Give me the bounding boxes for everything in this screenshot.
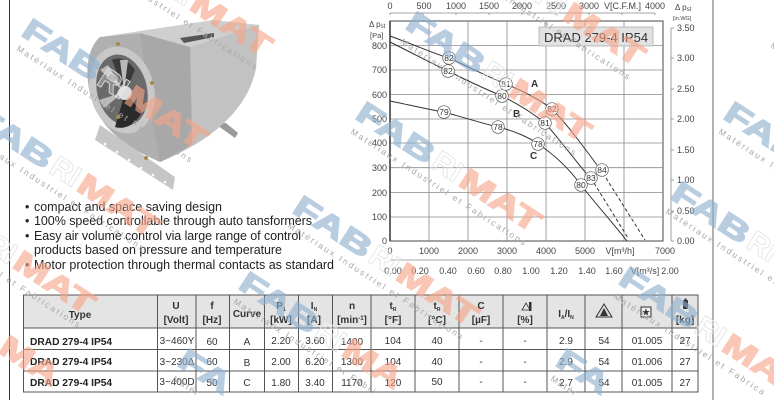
table header row: 1 [283, 307, 286, 313]
watermark: repeated FABRIMAT logo: FAB [16, 13, 107, 88]
table header row: Type [69, 310, 92, 321]
left axis: static pressure in Pa: 300 [372, 163, 387, 173]
table header row: [A] [307, 315, 321, 326]
watermark: repeated FABRIMAT logo: FA [172, 343, 238, 400]
watermark: repeated FABRIMAT logo: FAB [665, 176, 756, 251]
right axis: static pressure in inches WG: 0.00 [677, 236, 695, 246]
table row: curve A: 60 [206, 337, 218, 348]
curve A: A [531, 79, 538, 90]
table header row: A [561, 315, 565, 321]
bottom axis: V in cubic metres per second: 0.40 [439, 266, 457, 276]
table row: curve C: 1.80 [271, 378, 291, 389]
bottom axis: V in cubic metres per hour: 5000 [575, 246, 595, 256]
table row: curve B: B [244, 358, 251, 369]
icon: centrifugal fan photo [80, 20, 260, 190]
table row: curve A [30, 336, 691, 348]
table row: curve C: C [243, 378, 251, 389]
watermark: repeated FABRIMAT logo: FAB [287, 190, 378, 265]
watermark: repeated FABRIMAT logo: MA [716, 328, 774, 391]
top axis: V in CFM: 500 [416, 1, 432, 11]
bottom axis: V in cubic metres per second: 0.20 [411, 266, 429, 276]
table header row: R [437, 307, 441, 313]
table header row: -1 [358, 316, 364, 322]
left axis: static pressure in Pa: st [381, 24, 386, 30]
left axis: static pressure in Pa: 700 [372, 65, 387, 75]
feature bullet list: compact and space saving design [34, 200, 222, 214]
feature bullet list: • [25, 258, 29, 272]
curve B: B [513, 109, 520, 120]
feature bullet list: • [25, 214, 29, 228]
feature bullet list: • [25, 200, 29, 214]
icon: weight [683, 298, 688, 309]
right axis: static pressure in inches WG: 1.00 [677, 175, 695, 185]
top axis: V in CFM: 0 [387, 1, 393, 11]
left axis: static pressure in Pa: 600 [372, 90, 387, 100]
table row: curve B: 2.9 [559, 357, 573, 368]
left axis: static pressure in Pa: 100 [372, 212, 387, 222]
table header row: C [477, 301, 485, 312]
table header row: n [349, 301, 355, 312]
right axis: static pressure in inches WG: Δ p [675, 3, 687, 12]
left axis: static pressure in Pa [369, 20, 387, 246]
watermark: repeated FABRIMAT logo: MA [336, 333, 408, 396]
efficiency value markers: 82 [444, 53, 454, 63]
specifications table [24, 295, 698, 392]
bottom axis: V in cubic metres per second: 1.20 [550, 266, 568, 276]
watermark: repeated FABRIMAT logo: FA [550, 343, 616, 400]
table row: curve C: 120 [385, 378, 402, 389]
table row: curve C: DRAD 279-4 IP54 [30, 378, 112, 389]
top axis: V in CFM [387, 1, 665, 15]
bottom axis: V in cubic metres per second [384, 260, 679, 276]
bottom axis: V in cubic metres per hour [387, 246, 675, 256]
table row: curve C: 50 [431, 377, 443, 388]
watermark: repeated FABRIMAT logo: Matér [549, 373, 579, 398]
table header row: P [276, 301, 283, 312]
curve A [390, 36, 645, 240]
bottom axis: V in cubic metres per hour: 2000 [458, 246, 478, 256]
bottom axis: V in cubic metres per second: 1.40 [578, 266, 596, 276]
feature bullet list [25, 200, 334, 272]
table header row: ] [364, 315, 367, 326]
table row: curve A: 01.005 [632, 336, 663, 347]
table row: curve A: 2.9 [559, 336, 573, 347]
top axis: V in CFM: 1500 [479, 1, 499, 11]
top axis: V in CFM: 2000 [512, 1, 532, 11]
right axis: static pressure in inches WG: 3.00 [677, 53, 695, 63]
feature bullet list: Motor protection through thermal contacts as standard [34, 258, 334, 272]
efficiency value markers: 81 [540, 118, 550, 128]
table row: curve A: 3.60 [305, 336, 325, 347]
table row: curve C: 2.7 [559, 378, 573, 389]
table row: curve B: 2.00 [271, 357, 291, 368]
watermark: repeated FABRIMAT logo: FAB [400, 6, 491, 81]
table row: curve B: - [479, 357, 483, 368]
watermark: repeated FABRIMAT logo: MAT [71, 168, 165, 245]
watermark: repeated FABRIMAT logo: FAB [350, 96, 441, 171]
icon: delta I [522, 302, 532, 311]
table header row: I [558, 309, 561, 320]
bottom axis: V in cubic metres per second: 1.60 [605, 266, 623, 276]
efficiency value markers: 81 [501, 79, 511, 89]
right axis: static pressure in inches WG [671, 3, 695, 246]
table header row: N [570, 315, 574, 321]
table row: curve B: 3~230Δ [160, 357, 195, 368]
chart grid and frame [390, 21, 663, 241]
bottom axis: V in cubic metres per hour: 3000 [497, 246, 517, 256]
bottom axis: V in cubic metres per second: 0.80 [494, 266, 512, 276]
table header row: [Volt] [164, 315, 188, 326]
table header row: [%] [517, 315, 533, 326]
curve C [390, 101, 627, 241]
top axis: V in CFM: 3000 [579, 1, 599, 11]
table header row: [°C] [428, 315, 446, 326]
table header row: [µF] [472, 315, 490, 326]
watermark: repeated FABRIMAT logo: MAT [503, 73, 597, 150]
watermark: repeated FABRIMAT logo: RI [363, 239, 406, 283]
efficiency value markers: 84 [597, 165, 607, 175]
watermark: repeated FABRIMAT logo: RI [92, 62, 135, 106]
right axis: static pressure in inches WG: 2.00 [677, 114, 695, 124]
top axis: V in CFM: 4000 [645, 1, 665, 11]
table grid lines [24, 295, 698, 392]
watermark: repeated FABRIMAT logo: Matér [171, 373, 201, 398]
table row: curve B: 40 [431, 357, 443, 368]
watermark: repeated FABRIMAT logo: Matériaux Industriel et Fabri [232, 296, 378, 396]
top axis: V in CFM: 1000 [446, 1, 466, 11]
left axis: static pressure in Pa: [Pa] [370, 31, 383, 40]
table row: curve A: 1400 [341, 337, 364, 348]
bottom axis: V in cubic metres per second: 0.00 [384, 266, 402, 276]
model label box: DRAD 279-4 IP54 [544, 30, 648, 45]
table row: curve B: 54 [598, 357, 610, 368]
feature bullet list: products based on pressure and temperature [34, 243, 282, 257]
table header row: U [172, 301, 180, 312]
watermark: repeated FABRIMAT logo: RI [689, 310, 732, 354]
watermark: repeated FABRIMAT logo: MAT [390, 257, 484, 334]
left axis: static pressure in Pa: 400 [372, 138, 387, 148]
watermark: repeated FABRIMAT logo: MAT [7, 245, 101, 322]
feature bullet list: • [25, 229, 29, 243]
curve C: C [530, 151, 537, 162]
watermark: repeated FABRIMAT logo: Matériaux Industriel et Fabrications [349, 126, 528, 247]
watermark: repeated FABRIMAT logo: RI [44, 150, 87, 194]
bottom axis: V in cubic metres per second: 1.00 [522, 266, 540, 276]
right axis: static pressure in inches WG: 1.50 [677, 145, 695, 155]
table header row: [kW] [270, 315, 292, 326]
bottom axis: V in cubic metres per second: V[m³/s] [631, 266, 659, 276]
table header row: N [314, 307, 318, 313]
watermark: repeated FABRIMAT logo: Matériaux Industriel et Fabrications [15, 43, 194, 164]
watermark: repeated FABRIMAT logo: RI [309, 315, 352, 359]
table header row: f [210, 301, 214, 312]
feature bullet list: 100% speed controllable through auto tansformers [34, 214, 312, 228]
table row: curve C: - [523, 377, 527, 388]
table row: curve C: 54 [598, 378, 610, 389]
table header row: [kg] [676, 315, 694, 326]
watermark: repeated FABRIMAT logo: MAT [119, 80, 213, 157]
table row: curve A: 2.20 [271, 336, 291, 347]
left axis: static pressure in Pa: 200 [372, 188, 387, 198]
efficiency value markers: 80 [497, 91, 507, 101]
top axis: V in CFM: V[C.F.M.] [604, 1, 641, 11]
watermark: repeated FABRIMAT logo: FAB [233, 266, 324, 341]
bottom axis: V in cubic metres per hour: 4000 [536, 246, 556, 256]
table header row: R [393, 307, 397, 313]
efficiency value markers: 80 [576, 180, 586, 190]
table row: curve C: 3~400D [159, 377, 195, 388]
bottom axis: V in cubic metres per hour: 0 [387, 246, 393, 256]
table row: curve B: 1300 [341, 357, 364, 368]
efficiency value markers: 78 [493, 122, 503, 132]
efficiency value markers: 82 [443, 66, 453, 76]
table row: curve B [30, 357, 691, 369]
bottom axis: V in cubic metres per second: 0.60 [467, 266, 485, 276]
table row: curve B: DRAD 279-4 IP54 [30, 357, 112, 368]
icon: star box: ★ [642, 308, 651, 318]
left axis: static pressure in Pa: 500 [372, 114, 387, 124]
table row: curve B: - [523, 357, 527, 368]
table row: curve A: 27 [679, 336, 691, 347]
table row: curve C: - [479, 377, 483, 388]
bottom axis: V in cubic metres per hour: 1000 [419, 246, 439, 256]
right axis: static pressure in inches WG: 0.50 [677, 206, 695, 216]
table header row [24, 295, 698, 328]
table row: curve C: 50 [206, 378, 218, 389]
table row: curve A: - [523, 336, 527, 347]
top axis: V in CFM: 2500 [546, 1, 566, 11]
watermark: repeated FABRIMAT logo: MAT [453, 163, 547, 240]
watermark: repeated FABRIMAT logo: FAB [613, 261, 704, 336]
right axis: static pressure in inches WG: [in.WG] [673, 16, 692, 22]
left axis: static pressure in Pa: 800 [372, 41, 387, 51]
table row: curve C: 27 [679, 378, 691, 389]
table row: curve C: 01.005 [632, 378, 663, 389]
table header row: [Hz] [203, 315, 221, 326]
table row: curve B: 27 [679, 357, 691, 368]
efficiency value markers: 79 [439, 107, 449, 117]
efficiency value markers: 78 [533, 139, 543, 149]
table header row: t [434, 301, 437, 312]
left axis: static pressure in Pa: 0 [382, 236, 387, 246]
table row: curve B: 60 [206, 357, 218, 368]
bottom axis: V in cubic metres per hour: 7000 [655, 246, 675, 256]
bottom axis: V in cubic metres per hour: V[m³/h] [605, 246, 635, 256]
curve B [390, 42, 628, 238]
table row: curve A: A [244, 337, 251, 348]
icon: warning triangle [596, 304, 612, 317]
table row: curve A: 40 [431, 336, 443, 347]
table row: curve C: 3.40 [305, 378, 325, 389]
watermark: repeated FABRIMAT logo: Matériaux Industriel et Fabrications [286, 220, 465, 341]
watermark: repeated FABRIMAT logo: RI [476, 55, 519, 99]
left axis: static pressure in Pa: Δ p [369, 20, 381, 29]
right axis: static pressure in inches WG: 2.50 [677, 84, 695, 94]
table row: curve C: 1170 [341, 378, 363, 389]
table header row: [°F] [385, 315, 401, 326]
table row: curve B: 6.20 [305, 357, 325, 368]
efficiency value markers [438, 52, 608, 191]
table header row: Curve [233, 309, 262, 320]
table header row: t [390, 301, 393, 312]
performance chart [369, 1, 695, 276]
table row: curve C [30, 377, 691, 389]
table row: curve A: 54 [598, 336, 610, 347]
right axis: static pressure in inches WG: st [687, 7, 692, 13]
table header row: /I [565, 309, 570, 320]
table row: curve A: - [479, 336, 483, 347]
table row: curve A: 104 [385, 336, 402, 347]
table header row: I [311, 301, 314, 312]
watermark: repeated FABRIMAT logo: RI [426, 145, 469, 189]
bottom axis: V in cubic metres per second: 2.00 [661, 266, 679, 276]
table header row: [min [337, 315, 358, 326]
watermark: repeated FABRIMAT logo: Matériaux Industriel et Fabrications [399, 36, 578, 157]
efficiency value markers: 83 [586, 173, 596, 183]
table row: curve A: 3~460Y [160, 336, 195, 347]
table row: curve A: DRAD 279-4 IP54 [30, 337, 112, 348]
watermark: repeated FABRIMAT logo: Matériaux Industriel et Fabrica [612, 291, 767, 397]
efficiency value markers: 82 [547, 104, 557, 114]
feature bullet list: Easy air volume control via large range of control [34, 229, 301, 243]
table row: curve B: 01.006 [632, 357, 663, 368]
right axis: static pressure in inches WG: 3.50 [677, 23, 695, 33]
table row: curve B: 104 [385, 357, 402, 368]
